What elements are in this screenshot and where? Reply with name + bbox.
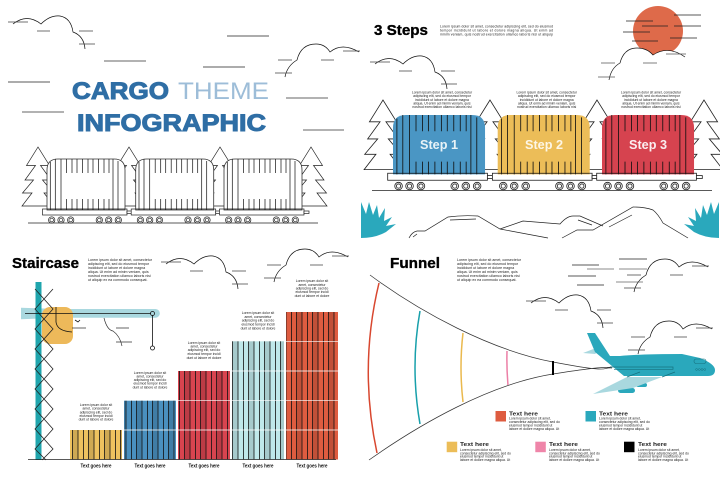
label: Step 3: Step 3 [629,137,667,152]
bar 4: pale teal [232,341,284,460]
intro text [457,258,522,282]
title [72,78,269,137]
heading: Staircase: Staircase [12,255,79,272]
panel: cargo theme title [8,16,360,223]
legend: teal: eiusmod tempor incididunt ut [599,424,642,428]
bar descriptions: eiusmod tempor incidi [80,414,113,418]
legend: black: eiusmod tempor incididunt ut [638,455,681,459]
legend: yellow: eiusmod tempor incididunt ut [460,455,503,459]
funnel stage 1: red [368,283,379,453]
heading: Funnel: Funnel [390,255,440,272]
bar descriptions: amet, consectetur [191,344,218,348]
step descriptions: adipiscing elit, sed do eiusmod tempor [622,94,681,98]
legend: black: consectetur adipiscing elit, sed do [638,451,689,455]
icon: left agave [361,202,396,238]
sun wind lines [623,15,701,41]
step descriptions: adipiscing elit, sed do eiusmod tempor [413,94,472,98]
bar descriptions: eiusmod tempor incidi [296,290,329,294]
title: INFOGRAPHIC [77,110,266,137]
bar descriptions: eiusmod tempor incidi [242,322,275,326]
intro text: adipiscing elit, sed do eiusmod tempor [457,262,519,266]
bar descriptions: eiusmod tempor incidi [134,382,167,386]
bar descriptions: dunt ut labore et dolore [187,356,222,360]
legend: pink: consectetur adipiscing elit, sed do [549,451,600,455]
bar descriptions: Lorem ipsum dolor sit [80,403,112,407]
sun [633,6,683,56]
legend: teal: Lorem ipsum dolor sit amet, [599,416,641,420]
step descriptions: nostrud exercitation ullamco laboris nisi [517,105,577,109]
bar descriptions: amet, consectetur [137,374,164,378]
bar descriptions: dunt ut labore et dolore [79,418,114,422]
ground line [372,190,712,192]
bar 2: blue [124,401,176,460]
step descriptions: Lorem ipsum dolor sit amet, consectetur [412,90,473,94]
outlined train [28,159,318,223]
legend: yellow: labore et dolore magna aliqua. Ut [460,458,510,462]
bar descriptions: Lorem ipsum dolor sit [134,371,166,375]
legend: yellow [447,442,511,462]
title: THEME [178,78,269,105]
legend: pink [535,442,600,462]
legend: pink: Text here [549,442,578,448]
step descriptions [412,90,682,109]
bar descriptions: adipiscing elit, sed do [134,378,166,382]
legend: red: consectetur adipiscing elit, sed do [509,420,560,424]
legend: teal [586,411,650,431]
legend: red: Lorem ipsum dolor sit amet, [509,416,551,420]
legend: teal: Text here [599,412,628,418]
bar labels: Text goes here [80,464,112,470]
legend: teal: consectetur adipiscing elit, sed do [599,420,650,424]
panel: staircase [12,249,349,470]
legend: red [496,411,560,431]
intro text: minim veniam, quis nostrud exercitation ullamco laboris nisi ut aliquip [440,32,553,36]
crane [21,282,160,460]
hills [409,207,688,238]
intro text: aliqua. Ut enim ad minim veniam, quis [457,270,518,274]
intro text [88,258,153,282]
step descriptions: nostrud exercitation ullamco laboris nisi [621,105,681,109]
step descriptions: incididunt ut labore et dolore magna [415,98,469,102]
intro text: tempor incididunt ut labore et dolore magna aliqua. Ut enim ad [440,28,553,32]
bar descriptions: Lorem ipsum dolor sit [242,311,274,315]
legend: teal: labore et dolore magna aliqua. Ut [599,427,649,431]
step descriptions: Lorem ipsum dolor sit amet, consectetur [517,90,578,94]
intro text: adipiscing elit, sed do eiusmod tempor [88,262,150,266]
funnel stage 5: black [552,361,554,375]
panel: 3 steps [361,6,720,238]
label: Step 1: Step 1 [420,137,458,152]
intro text: ut aliquip ex ea commodo consequat. [88,278,148,282]
legend: red: labore et dolore magna aliqua. Ut [509,427,559,431]
bar labels: Text goes here [188,464,220,470]
legend: pink: labore et dolore magna aliqua. Ut [549,458,599,462]
intro text: incididunt ut labore et dolore magna [457,266,514,270]
heading: 3 Steps: 3 Steps [374,22,428,39]
bar 5: orange red [286,312,338,460]
baseline [28,458,336,460]
intro text [440,24,553,36]
legend: pink: eiusmod tempor incididunt ut [549,455,592,459]
bar descriptions: dunt ut labore et dolore [241,326,276,330]
step descriptions: aliqua. Ut enim ad minim veniam, quis [622,101,680,105]
step descriptions: incididunt ut labore et dolore magna [520,98,574,102]
bar descriptions: amet, consectetur [245,315,272,319]
wagon: step 2 [492,115,598,190]
intro text: Lorem ipsum dolor sit amet, consectetur [457,258,522,262]
trees [22,147,327,206]
legend: black [624,442,689,462]
bar descriptions: adipiscing elit, sed do [188,348,220,352]
step descriptions: Lorem ipsum dolor sit amet, consectetur [621,90,682,94]
step descriptions: aliqua. Ut enim ad minim veniam, quis [413,101,471,105]
funnel stage 2: teal [415,311,420,424]
step descriptions: incididunt ut labore et dolore magna [624,98,678,102]
bar descriptions: Lorem ipsum dolor sit [296,279,328,283]
funnel outline [369,275,612,460]
intro text: ut aliquip ex ea commodo consequat. [457,278,517,282]
left cloud [370,56,457,89]
bar descriptions: dunt ut labore et dolore [295,294,330,298]
legend: black: Lorem ipsum dolor sit amet, [638,448,680,452]
step descriptions: adipiscing elit, sed do eiusmod tempor [518,94,576,98]
funnel stage 4: pink [507,351,508,385]
intro text: nostrud exercitation ullamco laboris nisi [457,274,520,278]
icon: right agave [684,202,719,238]
bar descriptions: adipiscing elit, sed do [296,286,328,290]
bar descriptions: adipiscing elit, sed do [242,318,274,322]
title: CARGO [72,78,169,105]
bar labels: Text goes here [242,464,274,470]
icon: airplane [583,333,715,394]
legend: yellow: Text here [460,442,489,448]
legend: black: Text here [638,442,667,448]
step descriptions: aliqua. Ut enim ad minim veniam, quis [518,101,576,105]
bar descriptions: Lorem ipsum dolor sit [188,341,220,345]
intro text: nostrud exercitation ullamco laboris nisi [88,274,151,278]
legend: red: eiusmod tempor incididunt ut [509,424,552,428]
legend: pink: Lorem ipsum dolor sit amet, [549,448,591,452]
panel: funnel [368,255,715,462]
wagon: step 3 [597,115,702,190]
legend: red: Text here [509,412,538,418]
intro text: incididunt ut labore et dolore magna [88,266,145,270]
bar descriptions: dunt ut labore et dolore [133,386,168,390]
legend: yellow: Lorem ipsum dolor sit amet, [460,448,502,452]
bar descriptions [79,279,330,422]
bar labels: Text goes here [296,464,328,470]
bar labels: Text goes here [134,464,166,470]
funnel stage 3: yellow [461,333,463,402]
bar 1: yellow [70,430,122,460]
bar descriptions: eiusmod tempor incidi [188,352,221,356]
wagon: step 1 [388,115,493,190]
bar descriptions: amet, consectetur [83,407,110,411]
legend: black: labore et dolore magna aliqua. Ut [638,458,688,462]
bar labels [80,464,328,470]
legend: yellow: consectetur adipiscing elit, sed do [460,451,511,455]
bar 3: red [178,371,230,460]
cloud over sun [598,48,686,85]
bar descriptions: adipiscing elit, sed do [80,410,112,414]
clouds and wind lines [8,16,360,130]
intro text: Lorem ipsum dolor sit amet, consectetur adipiscing elit, sed do eiusmod [440,24,553,28]
clouds [161,249,349,289]
wind lines and clouds [526,259,713,354]
intro text: aliqua. Ut enim ad minim veniam, quis [88,270,149,274]
bar descriptions: amet, consectetur [299,283,326,287]
trees [364,100,720,170]
step descriptions: nostrud exercitation ullamco laboris nisi [412,105,472,109]
label: Step 2: Step 2 [525,137,563,152]
intro text: Lorem ipsum dolor sit amet, consectetur [88,258,153,262]
